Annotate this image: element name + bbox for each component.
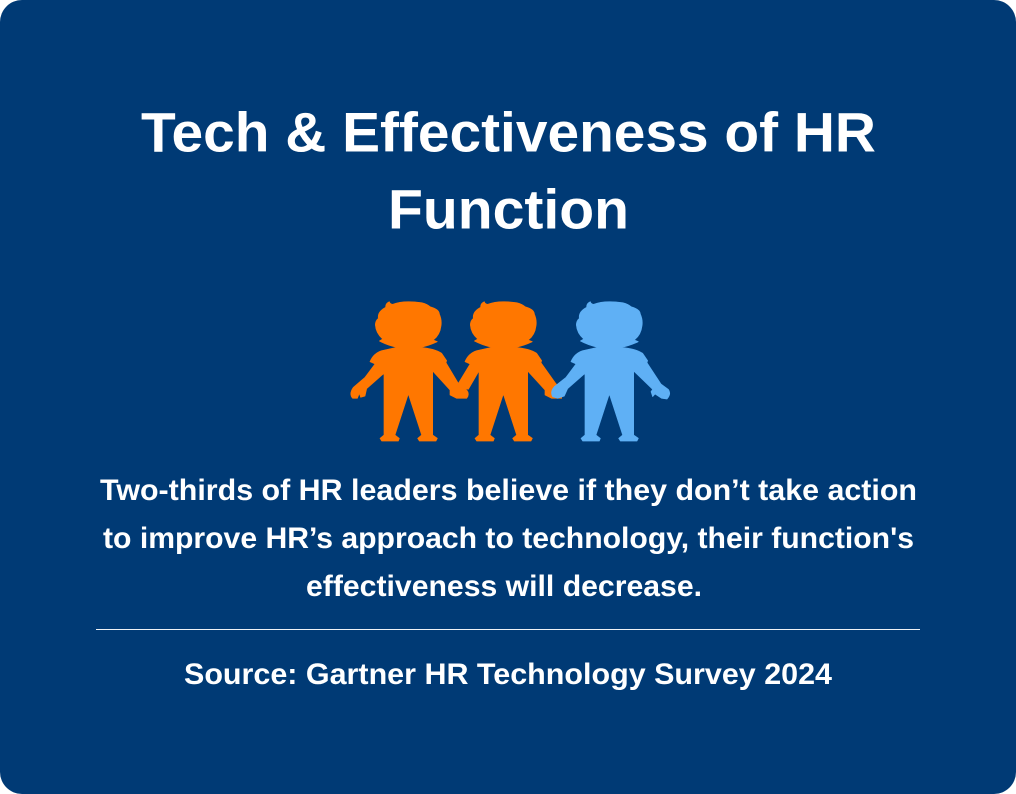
text block: main statement	[100, 474, 917, 603]
title: Function	[388, 178, 629, 240]
icon: orange person 2	[458, 302, 562, 441]
icon: three people holding hands	[351, 302, 670, 441]
text block: source: Source: Gartner HR Technology Survey 2024	[184, 658, 832, 691]
icon: blue person 3	[551, 302, 670, 441]
text block: main statement: to improve HR’s approach to technology, their function's	[103, 522, 914, 555]
title: Tech & Effectiveness of HR	[141, 100, 876, 164]
text block: main statement: Two-thirds of HR leaders believe if they don’t take action	[100, 474, 917, 507]
title	[141, 100, 876, 240]
icon: orange person 1	[351, 302, 468, 441]
text block: main statement: effectiveness will decrease.	[306, 570, 702, 603]
